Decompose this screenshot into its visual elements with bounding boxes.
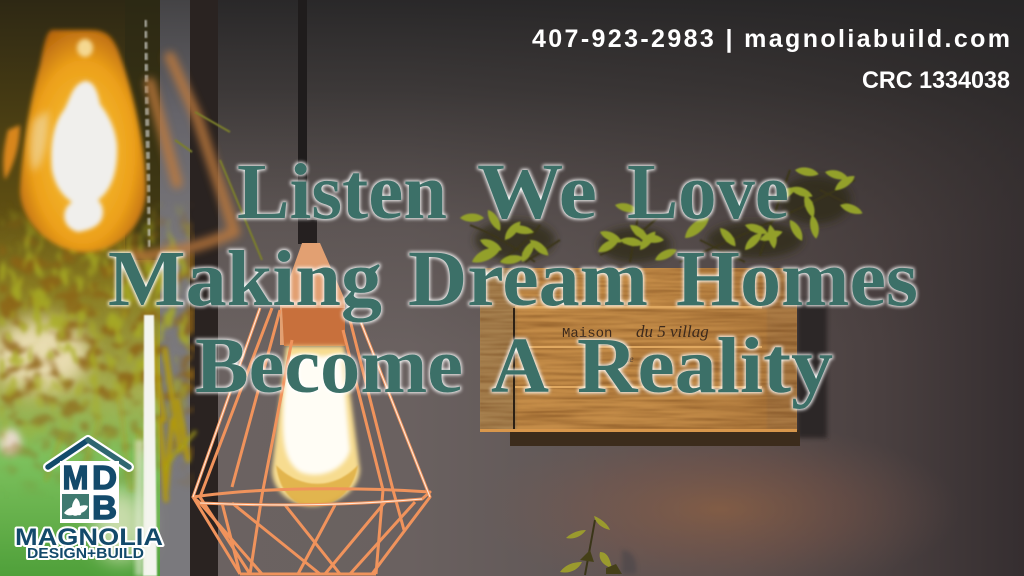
window frame bands (160, 0, 218, 576)
logo letters (62, 459, 117, 526)
phone and website: 407-923-2983 | magnoliabuild.com (532, 25, 1010, 53)
title line 2: Homes (676, 236, 918, 323)
left foliage and garden background (0, 0, 195, 576)
logo letters: B (92, 489, 117, 526)
logo letters: M (62, 459, 88, 496)
crate stencil text: du 5 villag (636, 322, 709, 341)
title line 2: Dream (408, 236, 648, 323)
plant sprigs (460, 166, 864, 266)
title line 3: Reality (577, 323, 833, 410)
contact details (532, 25, 1010, 94)
license number: CRC 1334038 (862, 67, 1010, 94)
logo roof icon (48, 440, 129, 467)
title line 1 (237, 149, 789, 236)
title line 3: A (491, 323, 549, 410)
title line 1: Listen (237, 149, 447, 236)
logo letters: D (92, 459, 117, 496)
crate stencil text: Maison (562, 326, 612, 342)
logo wordmark: MAGNOLIA (15, 524, 163, 551)
logo tile panel (60, 461, 119, 523)
blurred hanging bulb, top left (3, 30, 262, 260)
wooden crate with plants (460, 166, 864, 446)
title line 2 (108, 236, 918, 323)
crate stencil text: olie (620, 354, 634, 364)
crate stencil text (562, 322, 709, 364)
logo wordmark (15, 524, 163, 562)
logo wordmark: DESIGN+BUILD (27, 545, 144, 562)
title line 3: Become (195, 323, 463, 410)
title line 3 (195, 323, 833, 410)
logo: Magnolia Design+Build (15, 440, 163, 562)
title line 2: Making (108, 236, 382, 323)
title (108, 149, 918, 410)
title line 1: Love (627, 149, 789, 236)
magnolia flower icon (64, 498, 88, 516)
copper cage lamp with bulb (193, 0, 430, 574)
small plant at bottom (560, 516, 636, 575)
title line 1: We (477, 149, 597, 236)
plant shadows (475, 176, 851, 263)
